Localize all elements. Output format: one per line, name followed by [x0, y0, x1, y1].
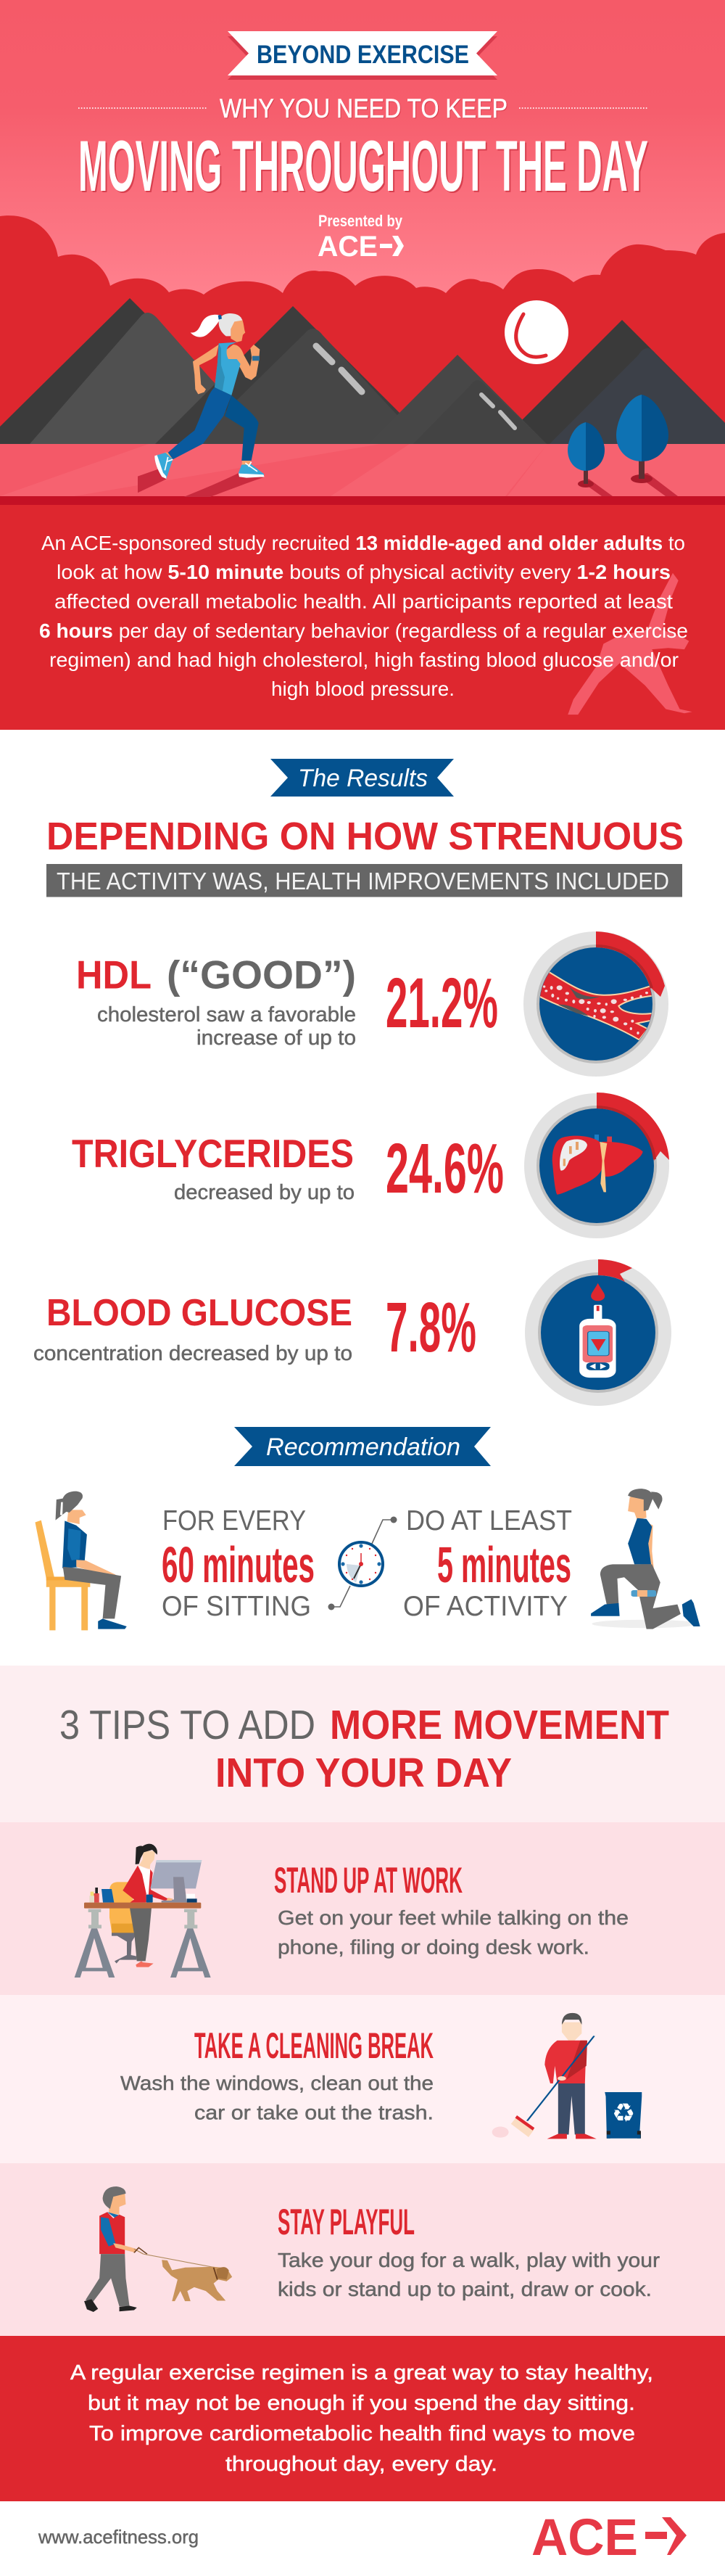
- text block: study intro: An ACE-sponsored study recruited 13 middle-aged and older adults to: [41, 532, 685, 554]
- stat: blood glucose: [33, 1259, 671, 1406]
- stat: HDL: 21.2%: [386, 963, 498, 1042]
- icon: clock with connectors: [328, 1516, 397, 1610]
- illustration: person sweeping with bin: ♻: [612, 2099, 635, 2128]
- text block: study intro: regimen) and had high cholesterol, high fasting blood glucose and/or: [49, 649, 679, 671]
- ribbon: recommendation: Recommendation: [266, 1433, 460, 1461]
- text block: do at least 5 minutes of activity: OF ACTIVITY: [403, 1591, 568, 1622]
- subtitle with dotted rules: WHY YOU NEED TO KEEP: [220, 94, 508, 123]
- tip heading: STAY PLAYFUL: [278, 2202, 415, 2242]
- tip text: [278, 2249, 660, 2300]
- text block: do at least 5 minutes of activity: 5 minutes: [437, 1536, 571, 1593]
- tip text: car or take out the trash.: [194, 2101, 434, 2124]
- stat: triglycerides: decreased by up to: [174, 1181, 355, 1204]
- text block: study intro: affected overall metabolic health. All participants reported at least: [54, 590, 673, 612]
- figure: seated woman on chair: [35, 1491, 127, 1630]
- text block: study intro: look at how 5-10 minute bouts of physical activity every 1-2 hours: [57, 561, 671, 583]
- panel: hero header: [0, 0, 725, 730]
- moon: [505, 300, 568, 364]
- text block: for every 60 minutes of sitting: 60 minutes: [162, 1536, 315, 1593]
- figure: yoga silhouette: [568, 573, 692, 715]
- text block: for every 60 minutes of sitting: OF SITTING: [162, 1591, 311, 1622]
- icon: artery: [539, 972, 654, 1040]
- panel: tip take a cleaning break: [0, 1995, 725, 2163]
- tip heading: STAND UP AT WORK: [274, 1860, 463, 1901]
- presented by: Presented by: [318, 212, 403, 230]
- panel: tips heading: 3 TIPS TO ADD: [59, 1702, 315, 1748]
- panel: tips heading: INTO YOUR DAY: [215, 1750, 512, 1796]
- mountains: [0, 298, 725, 444]
- ribbon: the results: The Results: [298, 765, 428, 792]
- tip text: Take your dog for a walk, play with your: [278, 2249, 660, 2271]
- text block: study intro: [39, 532, 688, 700]
- stat: blood glucose: concentration decreased by up to: [33, 1342, 352, 1365]
- panel: closing message: A regular exercise regimen is a great way to stay healthy,: [70, 2361, 653, 2384]
- panel: tip stand up at work: [0, 1822, 725, 1995]
- stat: HDL: [76, 931, 668, 1077]
- stat: triglycerides: [72, 1092, 669, 1238]
- tip text: Wash the windows, clean out the: [120, 2072, 434, 2094]
- trees: [568, 395, 678, 496]
- icon: liver: [552, 1135, 643, 1195]
- tip text: [278, 1906, 629, 1959]
- text block: for every 60 minutes of sitting: [162, 1505, 315, 1622]
- stat: HDL: (“GOOD”): [167, 952, 356, 997]
- panel: tips heading: [0, 1666, 725, 1822]
- stat: blood glucose: BLOOD GLUCOSE: [46, 1292, 352, 1334]
- panel: closing message: To improve cardiometabolic health find ways to move: [89, 2422, 635, 2445]
- text block: do at least 5 minutes of activity: DO AT LEAST: [406, 1505, 572, 1536]
- heading: depending on how strenuous: DEPENDING ON HOW STRENUOUS: [46, 815, 684, 858]
- panel: tips heading: MORE MOVEMENT: [330, 1702, 669, 1748]
- illustration: man walking dog: [84, 2186, 232, 2312]
- logo: ACE header: ACE: [318, 231, 378, 263]
- text block: study intro: 6 hours per day of sedentary behavior (regardless of a regular exercise: [39, 620, 688, 642]
- gauge: HDL: [523, 931, 668, 1077]
- icon: glucose meter: [579, 1283, 616, 1378]
- tip text: kids or stand up to paint, draw or cook.: [278, 2278, 652, 2300]
- tip text: Get on your feet while talking on the: [278, 1906, 629, 1929]
- ground: [0, 444, 725, 505]
- ribbon: recommendation: [234, 1427, 491, 1466]
- gauge: blood glucose: [525, 1259, 671, 1406]
- ribbon: beyond exercise: [228, 31, 497, 80]
- runner: [138, 313, 265, 497]
- panel: closing message: throughout day, every day.: [225, 2453, 497, 2476]
- red cloud silhouette: [0, 215, 725, 508]
- stat: blood glucose: 7.8%: [386, 1288, 476, 1367]
- website url: www.acefitness.org: [38, 2526, 199, 2548]
- panel: closing message: but it may not be enough if you spend the day sitting.: [88, 2392, 635, 2415]
- figure: woman doing lunge: [591, 1489, 700, 1629]
- illustration: standing desk: [75, 1844, 211, 1978]
- stat: HDL: HDL: [76, 952, 152, 997]
- stat: HDL: increase of up to: [196, 1026, 356, 1050]
- panel: tip stay playful: [0, 2163, 725, 2336]
- stat: HDL: cholesterol saw a favorable: [97, 1003, 356, 1026]
- tip text: phone, filing or doing desk work.: [278, 1935, 589, 1959]
- tip text: [120, 2072, 434, 2124]
- text block: study intro: high blood pressure.: [271, 678, 455, 700]
- panel: closing message: [0, 2336, 725, 2501]
- text block: do at least 5 minutes of activity: [403, 1505, 572, 1622]
- illustration: person sweeping with bin: [492, 2013, 642, 2139]
- tip heading: TAKE A CLEANING BREAK: [194, 2025, 434, 2066]
- ribbon: beyond exercise: BEYOND EXERCISE: [257, 41, 469, 69]
- stat: triglycerides: TRIGLYCERIDES: [72, 1131, 354, 1176]
- gauge: triglycerides: [524, 1092, 669, 1238]
- stat: triglycerides: 24.6%: [386, 1129, 504, 1208]
- logo: ACE footer: ACE: [531, 2509, 638, 2567]
- subheading bar: THE ACTIVITY WAS, HEALTH IMPROVEMENTS INCLUDED: [57, 868, 669, 894]
- ribbon: the results: [270, 759, 454, 797]
- text block: for every 60 minutes of sitting: FOR EVERY: [162, 1505, 306, 1536]
